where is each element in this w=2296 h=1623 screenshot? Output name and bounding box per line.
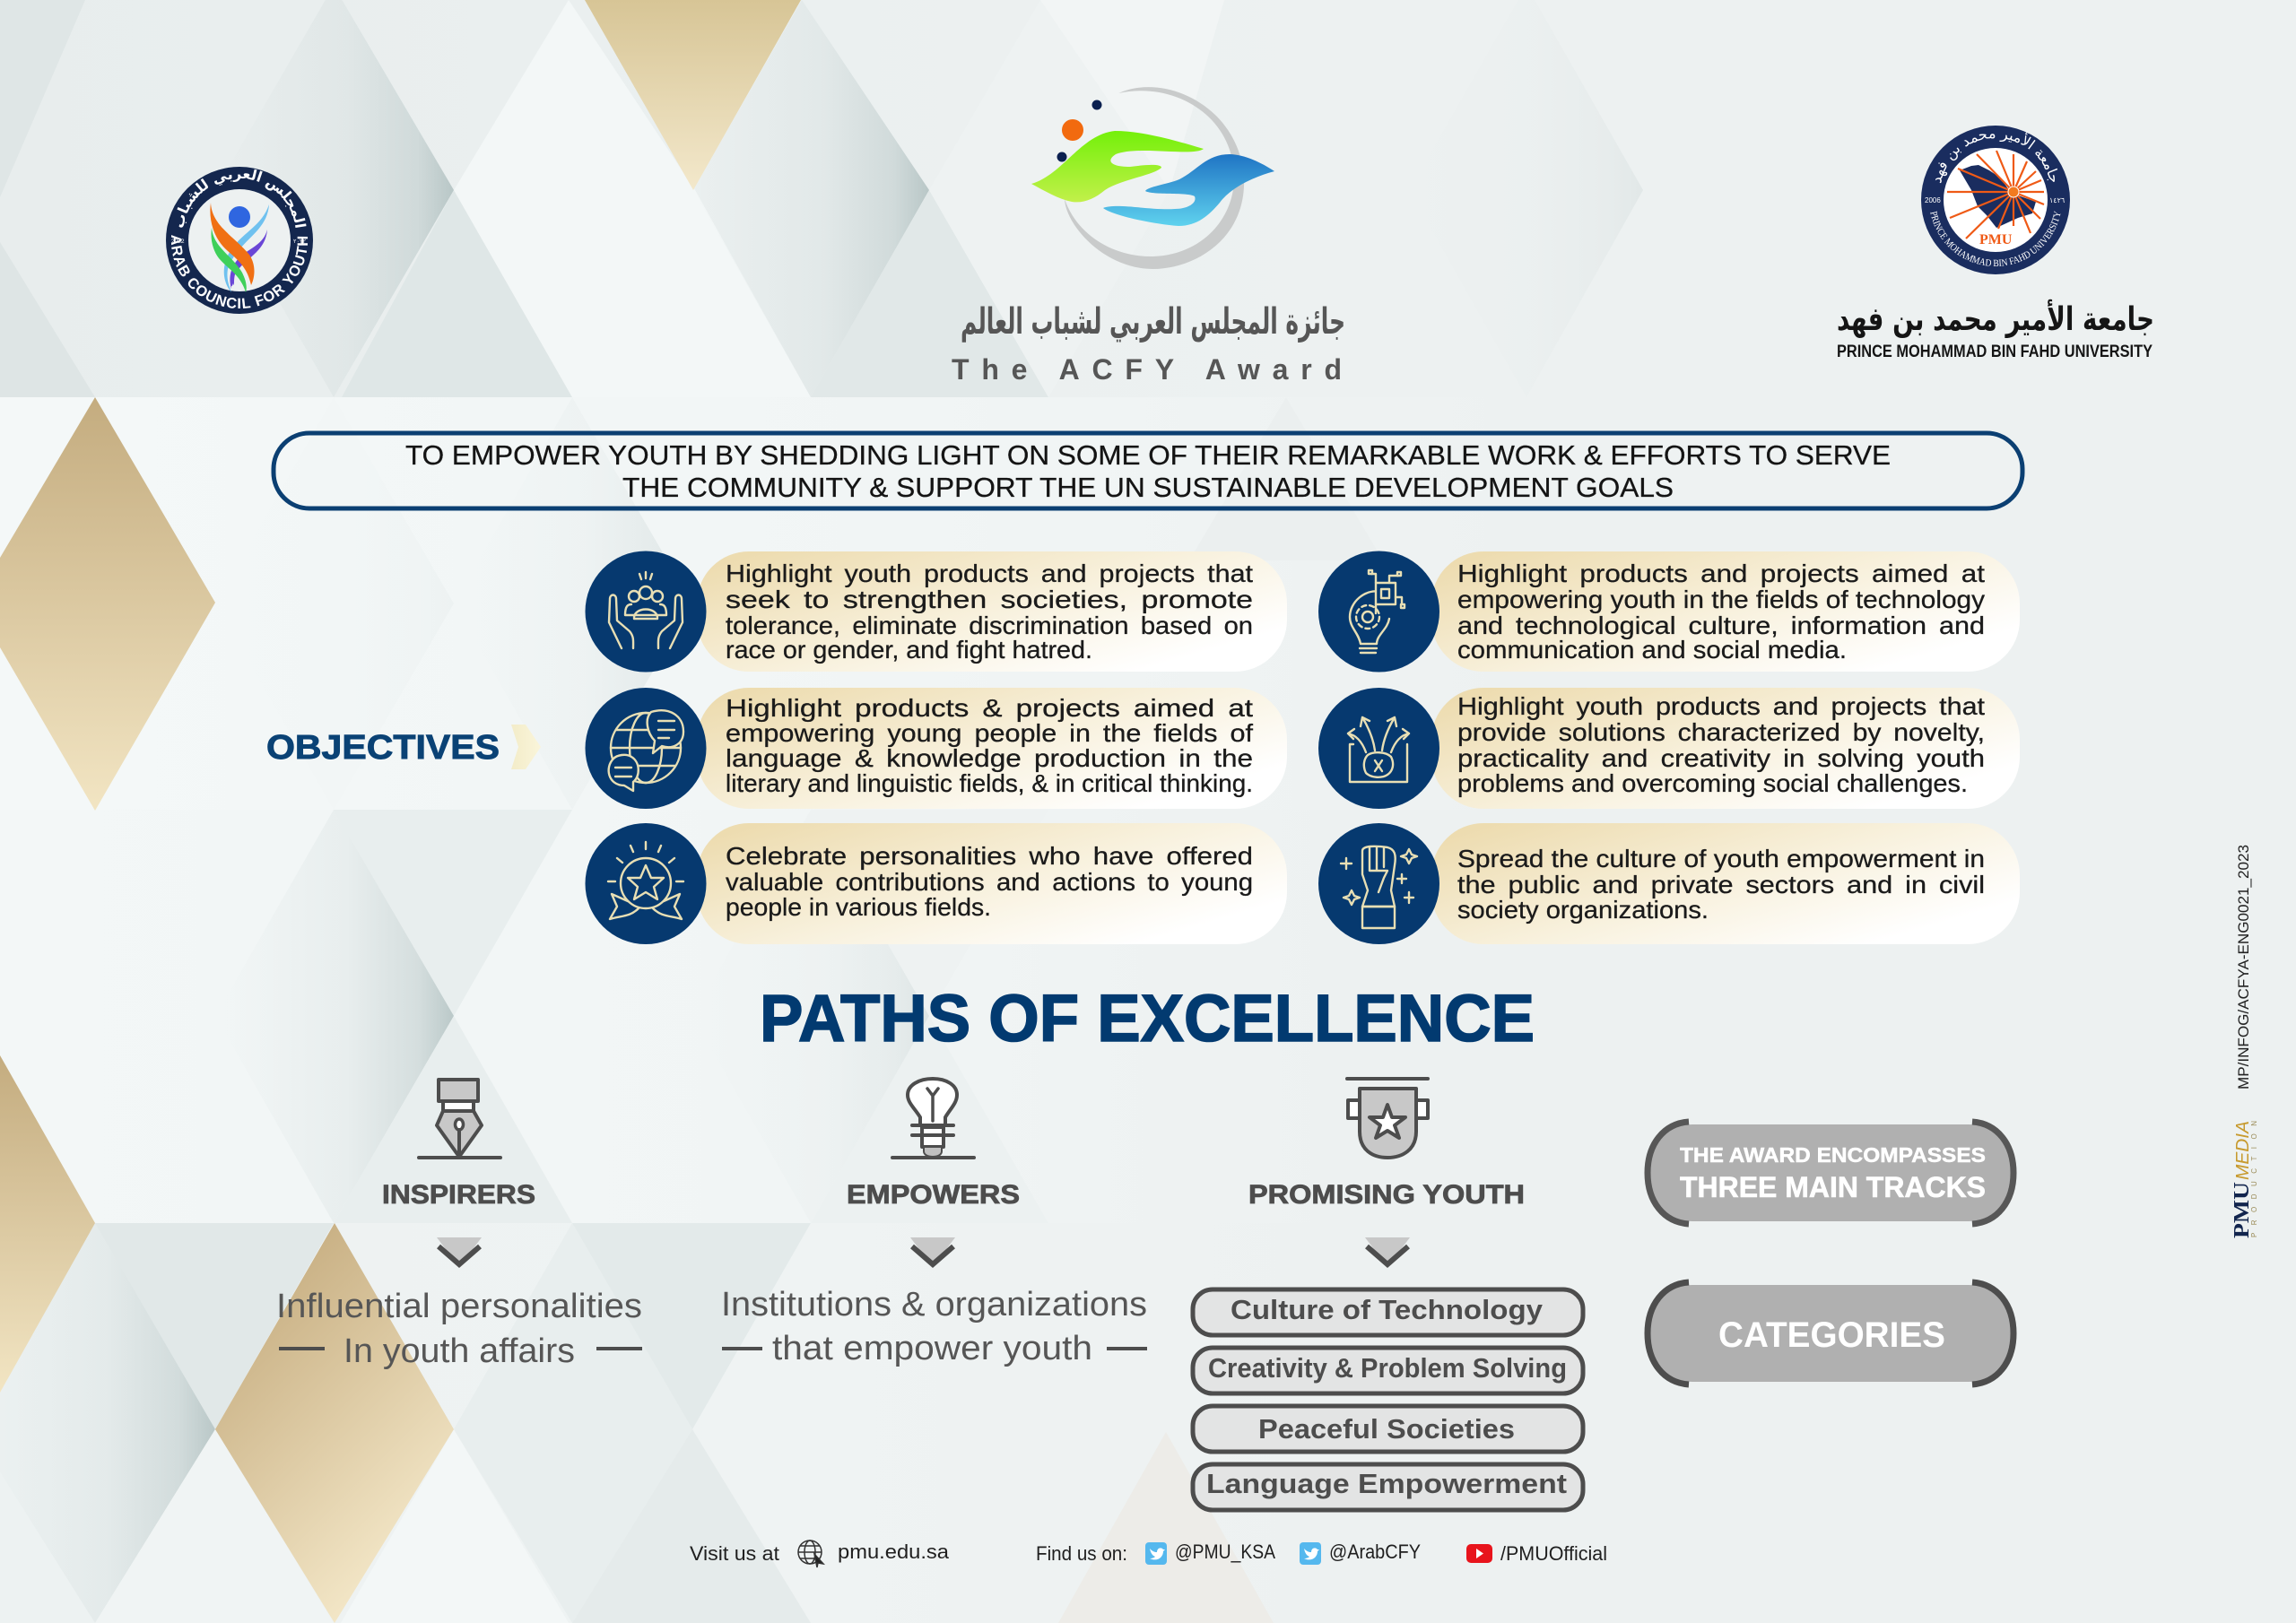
mission statement xyxy=(274,433,2022,508)
logo: PMU: ١٤٢٦ xyxy=(2049,196,2065,204)
badge: categories xyxy=(1648,1282,2013,1384)
document code: MP/INFOG/ACFYA-ENG0021_2023 xyxy=(2235,845,2252,1089)
objective 1: Highlight youth products and projects that xyxy=(726,560,1253,587)
objectives label: OBJECTIVES xyxy=(266,729,500,767)
objective 2: empowering young people in the fields of xyxy=(726,719,1253,747)
objective 5: provide solutions characterized by novelty, xyxy=(1457,718,1985,746)
objective 1 xyxy=(585,551,1287,673)
objective 3: Celebrate personalities who have offered xyxy=(726,842,1253,870)
objective 5 xyxy=(1318,688,2020,809)
logo: ACFY Award xyxy=(952,87,1345,386)
path: inspirers: INSPIRERS xyxy=(382,1180,535,1210)
objective 6: society organizations. xyxy=(1457,896,1709,924)
icon: award star badge xyxy=(608,842,683,919)
objectives label xyxy=(266,725,541,769)
objective 4: Highlight products and projects aimed at xyxy=(1457,560,1985,587)
icon: hands holding people xyxy=(609,572,683,648)
logo: PMU: 2006 xyxy=(1925,196,1941,204)
logo: ACFY Award: جائزة المجلس العربي لشباب العالم xyxy=(961,301,1345,343)
badge: three main tracks: THE AWARD ENCOMPASSES xyxy=(1680,1143,1986,1167)
logo: PMU: PRINCE MOHAMMAD BIN FAHD UNIVERSITY xyxy=(1930,211,2061,266)
path: empowers: Institutions & organizations xyxy=(721,1286,1147,1324)
logo: PMU: PRINCE MOHAMMAD BIN FAHD UNIVERSITY xyxy=(1837,343,2152,361)
category: language empowerment xyxy=(1193,1464,1583,1510)
icon: brain and arrows xyxy=(1348,717,1409,782)
arrow xyxy=(437,1237,482,1267)
path: promising youth: PROMISING YOUTH xyxy=(1248,1180,1525,1210)
arrow xyxy=(910,1237,955,1267)
logo: Arab Council for Youth: المجلس العربي للشباب xyxy=(177,169,307,228)
path: inspirers: Influential personalities xyxy=(276,1288,642,1325)
logo: PMU: جامعة الأمير محمد بن فهد xyxy=(1837,299,2154,338)
path: empowers: EMPOWERS xyxy=(847,1180,1020,1210)
objective 6 xyxy=(1318,823,2020,944)
mission statement: THE COMMUNITY & SUPPORT THE UN SUSTAINABLE DEVELOPMENT GOALS xyxy=(622,472,1674,503)
icon: raised fist with sparkles xyxy=(1341,846,1417,928)
category: creativity xyxy=(1193,1348,1583,1393)
objective 3: people in various fields. xyxy=(726,893,991,921)
logo: PMU media production: MEDIA xyxy=(2233,1121,2253,1180)
badge: categories: CATEGORIES xyxy=(1718,1315,1945,1355)
logo: Arab Council for Youth: 2022 xyxy=(171,239,185,245)
logo: Arab Council for Youth: ARAB COUNCIL FOR YOUTH xyxy=(171,235,309,308)
objective 4 xyxy=(1318,551,2020,673)
logo: PMU xyxy=(1837,126,2154,361)
icon: shield with star xyxy=(1347,1079,1428,1158)
logo: PMU media production xyxy=(2231,1121,2258,1238)
objective 6: Spread the culture of youth empowerment in xyxy=(1457,845,1985,872)
logo: PMU: جامعة الأمير محمد بن فهد xyxy=(1935,132,2057,183)
path: empowers xyxy=(721,1079,1147,1367)
objective 2: literary and linguistic fields, & in critical thinking. xyxy=(726,769,1253,797)
objective 1: tolerance, eliminate discrimination based on xyxy=(726,612,1253,639)
footer contact line: @PMU_KSA xyxy=(1175,1541,1275,1563)
arrow xyxy=(1365,1237,1410,1267)
logo: Arab Council for Youth xyxy=(166,167,313,314)
logo: PMU media production: PRODUCTION xyxy=(2250,1121,2258,1237)
footer contact line: @ArabCFY xyxy=(1329,1541,1421,1563)
objective 2: language & knowledge production in the xyxy=(726,744,1253,772)
objective 2 xyxy=(585,688,1287,809)
footer contact line: /PMUOfficial xyxy=(1500,1542,1607,1565)
icon: twitter xyxy=(1300,1542,1321,1565)
icon: light bulb xyxy=(892,1079,974,1158)
category: language empowerment: Language Empowerment xyxy=(1206,1468,1567,1499)
objective 5: Highlight youth products and projects that xyxy=(1457,692,1985,720)
footer contact line: Visit us at xyxy=(690,1542,779,1565)
logo: ACFY Award: The ACFY Award xyxy=(952,353,1342,386)
badge: three main tracks: THREE MAIN TRACKS xyxy=(1680,1171,1986,1203)
objective 5: practicality and creativity in solving youth xyxy=(1457,744,1985,772)
footer contact line: Find us on: xyxy=(1036,1542,1127,1565)
path: empowers: that empower youth xyxy=(772,1330,1092,1367)
icon: globe xyxy=(798,1541,823,1567)
objective 5: problems and overcoming social challenges. xyxy=(1457,769,1968,797)
objective 2: Highlight products & projects aimed at xyxy=(726,694,1253,722)
objective 4: communication and social media. xyxy=(1457,636,1847,664)
mission statement: TO EMPOWER YOUTH BY SHEDDING LIGHT ON SOME OF THEIR REMARKABLE WORK & EFFORTS TO SERVE xyxy=(405,439,1891,471)
path: inspirers: In youth affairs xyxy=(344,1332,575,1370)
icon: youtube xyxy=(1466,1544,1492,1563)
objective 4: empowering youth in the fields of technology xyxy=(1457,586,1985,613)
logo: PMU media production: PMU xyxy=(2231,1182,2254,1238)
icon: globe with speech bubbles xyxy=(609,710,683,791)
icon: bulb with gear and chip xyxy=(1350,570,1405,653)
icon: fountain pen xyxy=(419,1080,500,1158)
badge: three main tracks xyxy=(1648,1122,2013,1224)
objective 3 xyxy=(585,823,1287,944)
icon: twitter xyxy=(1145,1542,1167,1565)
objective 6: the public and private sectors and in civil xyxy=(1457,871,1985,898)
objective 3: valuable contributions and actions to young xyxy=(726,868,1253,896)
footer contact line xyxy=(690,1541,1607,1567)
path: promising youth xyxy=(1193,1079,1583,1510)
category: culture of technology: Culture of Technology xyxy=(1231,1294,1544,1325)
heading: paths of excellence: PATHS OF EXCELLENCE xyxy=(760,981,1535,1055)
logo: PMU: PMU xyxy=(1979,232,2013,247)
category: creativity: Creativity & Problem Solving xyxy=(1208,1352,1567,1384)
objective 1: race or gender, and fight hatred. xyxy=(726,636,1092,664)
category: peaceful societies xyxy=(1193,1406,1583,1452)
gold diamonds xyxy=(0,0,801,1623)
path: inspirers xyxy=(276,1080,642,1370)
footer contact line: pmu.edu.sa xyxy=(838,1541,950,1563)
logo: Arab Council for Youth: ٢٠٢٢ xyxy=(293,239,306,245)
category: culture of technology xyxy=(1193,1289,1583,1335)
category: peaceful societies: Peaceful Societies xyxy=(1258,1413,1515,1445)
objective 4: and technological culture, information and xyxy=(1457,612,1985,639)
arrow xyxy=(511,725,541,769)
objective 1: seek to strengthen societies, promote xyxy=(726,586,1253,613)
